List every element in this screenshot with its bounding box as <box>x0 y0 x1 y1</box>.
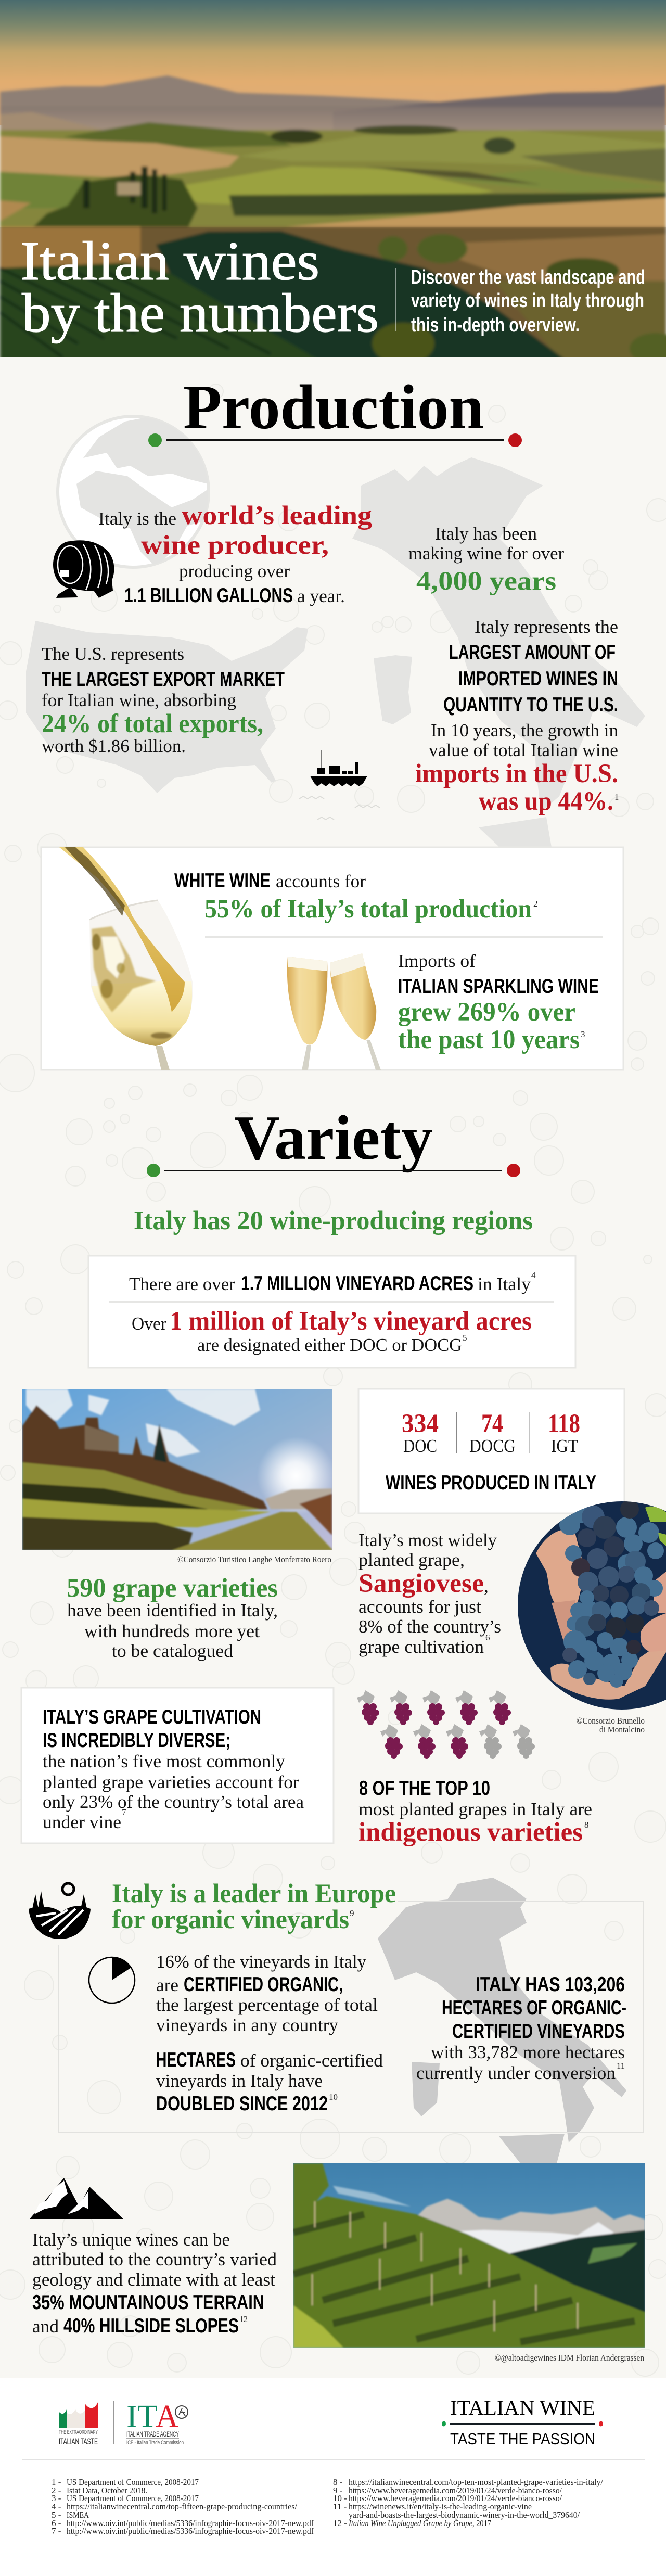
stat: 8 of the top 10: 8 OF THE TOP 10 <box>359 1777 490 1800</box>
map: Italy organic vineyards <box>378 1878 626 2163</box>
panel: DOC, DOCG, IGT: WINES PRODUCED IN ITALY <box>386 1472 596 1494</box>
text: white wine share <box>174 870 538 924</box>
stat: Sangiovese: accounts for just <box>358 1597 481 1617</box>
panel: vineyard acres: 4 <box>531 1270 536 1280</box>
stat: 103,206 hectares: with 33,782 more hectares <box>431 2042 625 2062</box>
references column 1: https://italianwinecentral.com/top-fifteen-grape-producing-countries/ <box>67 2502 297 2511</box>
logo: Italian Wine Taste the Passion: TASTE THE PASSION <box>450 2430 595 2448</box>
background map: globe <box>58 416 209 567</box>
references column 2: https://www.beveragemedia.com/2019/01/24/verde-bianco-rosso/ <box>349 2493 562 2503</box>
stat: world's leading wine producer: producing over <box>179 561 290 581</box>
stat: hectares doubled: DOUBLED SINCE 2012 <box>156 2093 328 2115</box>
text: white wine share: 2 <box>533 899 538 909</box>
stat: world's leading wine producer: a year. <box>297 586 345 606</box>
hero title: by the numbers <box>22 283 379 343</box>
stat: certified organic: CERTIFIED ORGANIC, <box>184 1973 343 1996</box>
hero title <box>20 231 379 343</box>
stat: hectares doubled: HECTARES <box>156 2049 236 2071</box>
stat: certified organic <box>156 1952 378 2035</box>
text: sparkling wine growth: 3 <box>581 1029 585 1039</box>
stat: 20 wine-producing regions: Italy has 20 wine-producing regions <box>134 1206 533 1235</box>
stat: 8 of the top 10 <box>358 1777 592 1847</box>
logo: Italian Trade Agency <box>126 2399 188 2446</box>
stat: certified organic: are <box>156 1975 178 1995</box>
stat: largest amount of imported wines: QUANTITY TO THE U.S. <box>443 694 618 716</box>
stat: 103,206 hectares: 11 <box>617 2061 625 2071</box>
heading: leader in organic vineyards <box>112 1879 396 1934</box>
stat: Sangiovese: 8% of the country’s <box>358 1616 501 1637</box>
icon: pie chart 16 percent <box>89 1957 135 2003</box>
stat: hectares doubled: of organic-certified <box>240 2050 383 2071</box>
photo credit: Brunello <box>577 1716 645 1735</box>
references column 2: https://winenews.it/en/italy-is-the-leading-organic-vine <box>349 2502 532 2511</box>
text: sparkling wine growth: the past 10 years <box>398 1025 580 1054</box>
references column 1: 4 - <box>52 2502 61 2511</box>
icon: wine barrel <box>53 540 114 598</box>
stat: 8 of the top 10: most planted grapes in Italy are <box>358 1799 592 1819</box>
text: white wine share: accounts for <box>276 871 366 891</box>
logo: Italian Trade Agency: A <box>156 2399 178 2434</box>
stat: mountainous terrain: 40% HILLSIDE SLOPES <box>63 2315 239 2337</box>
references column 2: 12 - <box>333 2518 347 2528</box>
stat: 8 of the top 10: 8 <box>584 1820 589 1830</box>
references column 2 <box>333 2477 603 2528</box>
stat: world's leading wine producer: wine producer, <box>141 531 329 560</box>
stat: largest amount of imported wines <box>415 617 619 816</box>
stat: largest export market: THE LARGEST EXPORT MARKET <box>42 668 285 691</box>
photo: hands holding Sangiovese grapes <box>515 1499 666 1712</box>
references column 1 <box>52 2477 314 2536</box>
stat: largest export market: for Italian wine, absorbing <box>42 690 236 710</box>
references column 1: 5 - <box>52 2510 61 2520</box>
heading rule with green and red dots <box>148 433 522 447</box>
stat: Sangiovese: Italy’s most widely <box>358 1530 497 1550</box>
text: sparkling wine growth: ITALIAN SPARKLING WINE <box>398 975 599 998</box>
panel: DOC, DOCG, IGT: DOC <box>403 1436 437 1456</box>
stat: largest export market: The U.S. represents <box>42 644 184 664</box>
references column 2: 10 - <box>333 2493 347 2503</box>
panel: grape cultivation is diverse: the nation’s five most commonly <box>43 1751 286 1771</box>
references column 1: http://www.oiv.int/public/medias/5336/infographie-focus-oiv-2017-new.pdf <box>67 2518 314 2528</box>
text: white wine share: WHITE WINE <box>174 870 271 892</box>
references column 2: 11 - <box>333 2502 347 2511</box>
stat: largest amount of imported wines: was up 44%. <box>479 787 613 816</box>
stat: largest amount of imported wines: value of total Italian wine <box>429 740 618 760</box>
icon: mountains <box>30 2178 123 2219</box>
references column 1: US Department of Commerce, 2008-2017 <box>67 2493 199 2503</box>
panel: grape cultivation is diverse: IS INCREDIBLY DIVERSE; <box>43 1729 230 1752</box>
stat: mountainous terrain: attributed to the country’s varied <box>32 2249 277 2269</box>
panel: grape cultivation is diverse: planted grape varieties account for <box>43 1772 299 1792</box>
references column 2: https://www.beveragemedia.com/2019/01/24/verde-bianco-rosso/ <box>349 2485 562 2495</box>
hero subtitle <box>411 266 645 336</box>
stat: hectares doubled <box>156 2049 383 2115</box>
photo: castle and vineyard at sunset <box>22 1389 335 1550</box>
stat: largest amount of imported wines: 1 <box>614 792 619 802</box>
frame: organic section border <box>58 1901 643 2132</box>
logo: The Extraordinary Italian Taste: ITALIAN TASTE <box>59 2437 98 2446</box>
references column 1: 1 - <box>52 2477 61 2487</box>
heading: leader in organic vineyards: for organic vineyards <box>112 1905 349 1934</box>
references column 2: https://italianwinecentral.com/top-ten-most-planted-grape-varieties-in-italy/ <box>349 2477 603 2487</box>
stat: 103,206 hectares: currently under conversion <box>416 2063 616 2083</box>
logo: The Extraordinary Italian Taste <box>57 2401 99 2446</box>
stat: hectares doubled: 10 <box>329 2092 338 2102</box>
text: sparkling wine growth: grew 269% over <box>398 998 575 1027</box>
heading: leader in organic vineyards: Italy is a leader in Europe <box>112 1879 396 1908</box>
icon: vineyard landscape <box>29 1883 91 1939</box>
references column 1: http://www.oiv.int/public/medias/5336/infographie-focus-oiv-2017-new.pdf <box>67 2526 314 2536</box>
photo credit: Alto Adige: ©@altoadigewines IDM Florian Andergrassen <box>495 2353 644 2363</box>
panel: DOC, DOCG, IGT: 118 <box>548 1409 580 1438</box>
panel: DOC, DOCG, IGT: IGT <box>551 1436 578 1456</box>
icons: ten grape clusters, eight coloured <box>357 1690 535 1759</box>
footer background <box>0 2378 666 2576</box>
photo credit: Brunello: di Montalcino <box>599 1725 645 1735</box>
panel: grape cultivation is diverse: under vine <box>43 1812 121 1832</box>
stat: mountainous terrain: Italy’s unique wines can be <box>32 2229 230 2250</box>
panel: grape cultivation is diverse: only 23% of the country’s total area <box>43 1792 304 1812</box>
stat: 103,206 hectares: ITALY HAS 103,206 <box>476 1973 625 1996</box>
stat: Sangiovese <box>358 1530 501 1657</box>
references column 1: 3 - <box>52 2493 61 2503</box>
panel: vineyard acres: are designated either DOC or DOCG <box>197 1335 462 1355</box>
photo: vineyard and Dolomites <box>293 2163 645 2348</box>
stat: largest export market <box>42 644 285 756</box>
background map: United States <box>26 621 308 793</box>
stat: 4,000 years <box>408 524 564 596</box>
panel: grape cultivation is diverse <box>21 1688 334 1843</box>
references column 2: 9 - <box>333 2485 343 2495</box>
stat: Sangiovese: Sangiovese <box>358 1569 484 1598</box>
footer rule <box>22 2459 645 2460</box>
stat: 8 of the top 10: indigenous varieties <box>358 1818 583 1847</box>
panel: grape cultivation is diverse: 7 <box>122 1807 126 1817</box>
references column 2: yard-and-boasts-the-largest-biodynamic-winery-in-the-world_379640/ <box>349 2510 580 2520</box>
stat: 4,000 years: making wine for over <box>408 543 564 564</box>
panel: vineyard acres <box>88 1256 575 1368</box>
stat: mountainous terrain: 12 <box>239 2314 248 2324</box>
stat: certified organic: 16% of the vineyards in Italy <box>156 1952 366 1972</box>
panel: DOC, DOCG, IGT <box>358 1389 624 1513</box>
panel: vineyard acres: 1 million of Italy’s vineyard acres <box>170 1307 532 1336</box>
logo divider <box>113 2401 114 2444</box>
stat: world's leading wine producer <box>98 501 372 607</box>
stat: world's leading wine producer: Italy is the <box>98 508 176 529</box>
stat: 590 grape varieties: with hundreds more yet <box>84 1621 260 1641</box>
references column 1: Istat Data, October 2018. <box>67 2485 147 2495</box>
references column 1: 6 - <box>52 2518 61 2528</box>
heading: Production: Production <box>183 372 484 442</box>
stat: Sangiovese: grape cultivation <box>358 1637 484 1657</box>
stat: Sangiovese: planted grape, <box>358 1550 465 1570</box>
panel: DOC, DOCG, IGT: 334 <box>402 1409 439 1438</box>
hero title: Italian wines <box>20 231 319 291</box>
logo: Italian Trade Agency: ITALIAN TRADE AGENCY <box>126 2430 179 2438</box>
photo: champagne flutes <box>287 953 381 1070</box>
stat: largest amount of imported wines: Italy represents the <box>475 617 618 637</box>
stat: mountainous terrain: 35% MOUNTAINOUS TERRAIN <box>32 2291 264 2314</box>
stat: hectares doubled: vineyards in Italy have <box>156 2071 323 2091</box>
text: white wine share: 55% of Italy’s total production <box>204 895 532 924</box>
logo: Italian Wine Taste the Passion: ITALIAN WINE <box>450 2396 595 2419</box>
photo credit: Langhe: ©Consorzio Turistico Langhe Monferrato Roero <box>177 1554 331 1564</box>
stat: 590 grape varieties <box>67 1574 278 1661</box>
stat: mountainous terrain: and <box>32 2316 59 2337</box>
stat: 590 grape varieties: to be catalogued <box>112 1641 233 1661</box>
stat: world's leading wine producer: 1.1 BILLION GALLONS <box>124 584 293 607</box>
panel: white and sparkling wine <box>41 847 623 1070</box>
stat: Sangiovese: 6 <box>485 1633 490 1642</box>
logo: Italian Trade Agency: ICE - Italian Trade Commission <box>126 2440 184 2446</box>
panel: vineyard acres: in Italy <box>478 1274 531 1294</box>
hero subtitle: this in-depth overview. <box>411 314 580 336</box>
panel: vineyard acres: 1.7 MILLION VINEYARD ACRES <box>241 1272 473 1295</box>
stat: 103,206 hectares <box>416 1973 626 2083</box>
logo: Italian Wine Taste the Passion <box>442 2396 603 2448</box>
stat: mountainous terrain: geology and climate with at least <box>32 2269 275 2290</box>
stat: 590 grape varieties: 590 grape varieties <box>67 1574 278 1603</box>
heading: Variety: Variety <box>234 1103 433 1173</box>
stat: certified organic: vineyards in any country <box>156 2015 338 2035</box>
panel: grape cultivation is diverse: ITALY’S GRAPE CULTIVATION <box>43 1706 261 1728</box>
heading: leader in organic vineyards: 9 <box>350 1908 354 1918</box>
heading rule with green and red dots <box>147 1164 520 1177</box>
references column 1: 2 - <box>52 2485 61 2495</box>
panel: vineyard acres: There are over <box>129 1274 235 1294</box>
stat: largest amount of imported wines: imports in the U.S. <box>415 759 618 788</box>
stat: world's leading wine producer: world’s leading <box>182 501 372 530</box>
stat: mountainous terrain <box>32 2229 277 2337</box>
text: sparkling wine growth: Imports of <box>398 951 476 971</box>
stat: largest export market: worth $1.86 billion. <box>42 736 186 756</box>
references column 1: US Department of Commerce, 2008-2017 <box>67 2477 199 2487</box>
stat: Sangiovese: , <box>484 1576 489 1596</box>
stat: 4,000 years: 4,000 years <box>416 567 556 596</box>
panel: vineyard acres: Over <box>132 1313 166 1334</box>
icon: cargo ship <box>299 750 380 820</box>
stat: largest amount of imported wines: In 10 years, the growth in <box>431 720 618 741</box>
stat: largest amount of imported wines: IMPORTED WINES IN <box>458 668 618 690</box>
references column 2: 8 - <box>333 2477 343 2487</box>
references column 1: ISMEA <box>67 2510 89 2520</box>
background map: Italy <box>352 457 645 847</box>
photo: wine glass <box>59 847 193 1070</box>
references column 1: 7 - <box>52 2526 61 2536</box>
stat: certified organic: the largest percentage of total <box>156 1995 378 2015</box>
logo: Italian Trade Agency: IT <box>126 2399 158 2434</box>
stat: largest export market: 24% of total exports, <box>42 709 263 738</box>
hero photo: Tuscan landscape <box>0 0 666 364</box>
text: sparkling wine growth <box>398 951 599 1054</box>
references column 2: , 2017 <box>472 2518 491 2528</box>
photo credit: Brunello: ©Consorzio Brunello <box>577 1716 645 1726</box>
panel: vineyard acres: 5 <box>463 1333 467 1343</box>
stat: 590 grape varieties: have been identified in Italy, <box>67 1600 278 1621</box>
panel: DOC, DOCG, IGT: DOCG <box>469 1436 516 1456</box>
stat: 4,000 years: Italy has been <box>435 524 537 544</box>
panel: DOC, DOCG, IGT: 74 <box>481 1409 503 1438</box>
references column 2: Italian Wine Unplugged Grape by Grape <box>348 2518 472 2528</box>
logo: The Extraordinary Italian Taste: THE EXTRAORDINARY <box>59 2429 98 2435</box>
